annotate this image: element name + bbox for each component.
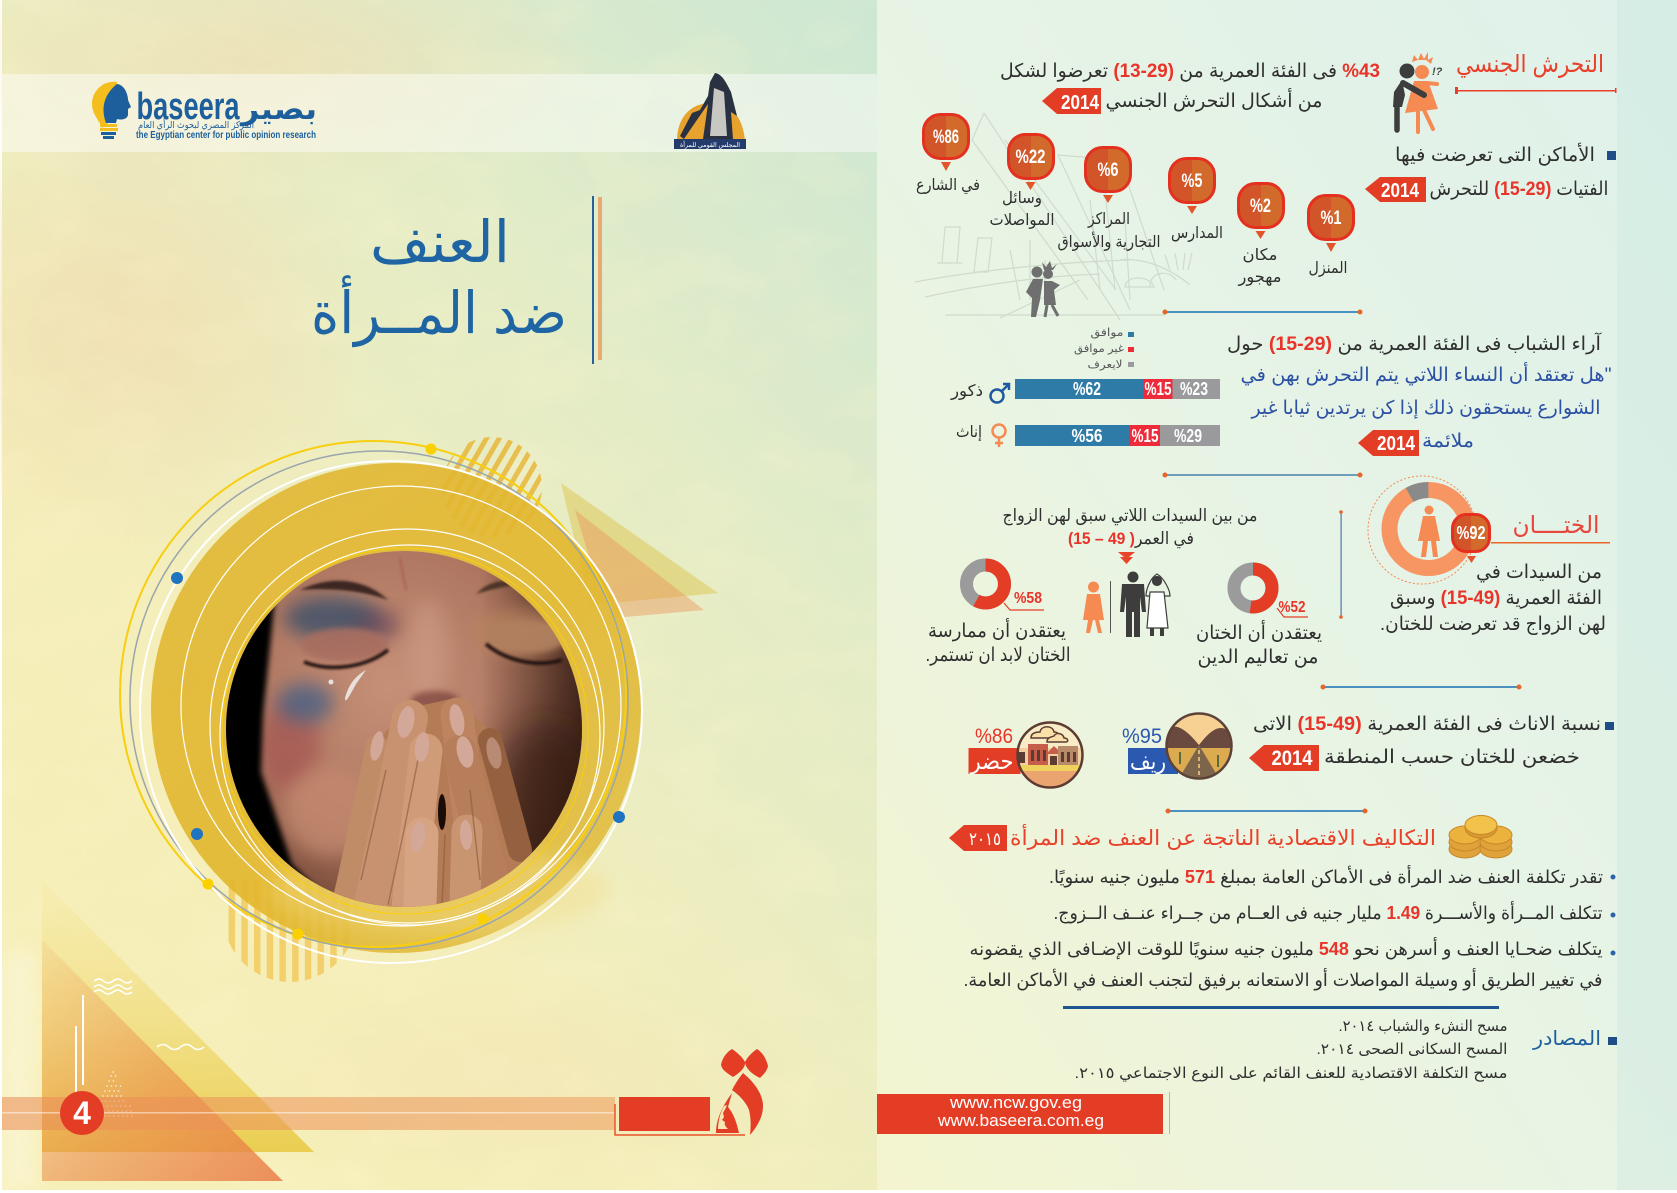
- sources list: [1074, 1018, 1508, 1083]
- stat line 2: من أشكال التحرش الجنسي: [1106, 88, 1322, 112]
- year tag: ٢٠١٥: [969, 829, 1001, 849]
- legend: موافق: [1090, 327, 1124, 340]
- eyelids and lashes: [301, 628, 389, 662]
- section: sexual harassment: [916, 51, 1616, 317]
- year tag: 2014: [1381, 180, 1420, 202]
- right page background: [877, 0, 1677, 1190]
- photo composition: [120, 437, 718, 982]
- bruise: [284, 596, 380, 640]
- ring lower highlight: [270, 845, 610, 935]
- icon: male symbol: [990, 384, 1009, 402]
- bar: male: %62: [1073, 379, 1101, 399]
- brows: [300, 581, 388, 600]
- year tag: 2014: [1377, 433, 1416, 455]
- hatched circle top: [442, 437, 542, 537]
- section heading: التحرش الجنسي: [1456, 51, 1604, 78]
- icon: harassment figures: [1393, 52, 1443, 132]
- icon: urban buildings: [1016, 722, 1084, 791]
- stat text: من السيدات في: [1476, 562, 1602, 583]
- year tag: [1358, 430, 1419, 456]
- stat text: لهن الزواج قد تعرضت للختان.: [1380, 614, 1606, 635]
- places heading line 1: الأماكن التى تعرضت فيها: [1395, 143, 1595, 166]
- website 1: www.ncw.gov.eg: [949, 1093, 1082, 1112]
- cost 1: تقدر تكلفة العنف ضد المرأة فى الأماكن العامة بمبلغ 571 مليون جنيه سنويًا.: [1049, 865, 1603, 888]
- label: deserted place: [1237, 247, 1282, 287]
- logo arabic subtitle: المركز المصري لبحوث الرأي العام: [138, 118, 254, 131]
- horizontal band: [2, 1097, 615, 1130]
- vertical divider: [1339, 510, 1343, 619]
- logo wordmark latin: baseera: [136, 86, 240, 128]
- pin: street: %86: [933, 127, 959, 148]
- sources list: مسح التكلفة الاقتصادية للعنف القائم على النوع الاجتماعي ٢٠١٥.: [1074, 1065, 1508, 1083]
- sources list: المسح السكانى الصحى ٢٠١٤.: [1316, 1041, 1508, 1058]
- sources heading: المصادر: [1532, 1028, 1601, 1050]
- value 52 percent: %52: [1278, 599, 1306, 616]
- title divider bars: [592, 196, 602, 364]
- divider: [1162, 310, 1362, 314]
- label: malls: المراكز: [1087, 211, 1130, 229]
- caption 58 percent: يعتقدن أن ممارسة: [928, 618, 1066, 642]
- bullet cost 1: [1610, 874, 1616, 880]
- bar: female: %15: [1132, 426, 1158, 446]
- title line 1: العنف: [370, 210, 510, 275]
- label: female: إناث: [956, 424, 982, 441]
- pin: deserted place: %2: [1250, 196, 1271, 217]
- orbit dots: [171, 444, 625, 940]
- bullet cost 2: [1610, 912, 1616, 918]
- label: malls: التجارية والأسواق: [1058, 231, 1160, 252]
- year tag: [1365, 177, 1426, 202]
- pin: transport: %22: [1016, 147, 1046, 168]
- pin: schools: [1170, 158, 1214, 214]
- opinion question: "هل تعتقد أن النساء اللاتي يتم التحرش بهن في: [1240, 362, 1612, 386]
- opinion question: [1240, 362, 1612, 452]
- left page background: [0, 0, 877, 1190]
- heading rule: [1455, 87, 1616, 94]
- stat text: [1380, 562, 1606, 635]
- bar: male: [1015, 379, 1220, 399]
- divider: [1162, 472, 1362, 478]
- icon: female symbol: [992, 424, 1006, 447]
- urban value: %86: [975, 725, 1013, 748]
- value 58 percent: %58: [1014, 590, 1042, 607]
- icon: woman profile logo: [716, 1049, 768, 1135]
- cost 2: تتكلف المــرأة والأســـرة 1.49 مليار جنيه فى العــام من جــراء عنــف الــزوج.: [1054, 901, 1602, 924]
- married women heading: في العمر( 49 – 15): [1068, 529, 1194, 549]
- married women heading: [1002, 506, 1258, 549]
- section: by region: [968, 712, 1614, 791]
- logo: national council for women: [674, 73, 746, 149]
- bullet: [1608, 1037, 1617, 1045]
- title line 2: ضد المــرأة: [311, 275, 567, 348]
- bar: male: %23: [1180, 379, 1208, 399]
- bar: female: [1015, 425, 1220, 446]
- year tag: [1249, 745, 1319, 771]
- icon: small grey figures: [1026, 261, 1060, 317]
- places heading line 2: الفتيات (29-15) للتحرش: [1430, 179, 1608, 200]
- page number: 4: [73, 1095, 91, 1131]
- label: home: المنزل: [1308, 260, 1348, 278]
- pin: malls: %6: [1098, 160, 1118, 181]
- divider: [1166, 808, 1368, 814]
- icon: bride and groom: [1120, 572, 1170, 637]
- sources rule: [1063, 1006, 1499, 1009]
- hair shadow: [226, 602, 318, 885]
- opinion question: ملائمة: [1422, 431, 1474, 452]
- label: malls: [1058, 211, 1160, 252]
- heading rule: [1491, 542, 1610, 544]
- label: street: في الشارع: [916, 177, 980, 195]
- logo english subtitle: the Egyptian center for public opinion research: [136, 129, 316, 141]
- label: schools: المدارس: [1171, 225, 1223, 243]
- year tag: [1042, 88, 1101, 114]
- icon: gold coins: [1449, 816, 1512, 858]
- logo wordmark arabic: بصير: [239, 93, 317, 126]
- section heading: الختــــان: [1512, 512, 1600, 539]
- arrow down: [1118, 552, 1135, 564]
- section: circumcision: [926, 476, 1610, 668]
- red bar with outline: [615, 1097, 745, 1135]
- pin 92 percent: [1452, 514, 1490, 563]
- opinion question: الشوارع يستحقون ذلك إذا كن يرتدين ثيابا غير: [1251, 398, 1600, 420]
- bullet: [1607, 151, 1616, 160]
- label: transport: [990, 190, 1054, 230]
- year tag: [949, 825, 1007, 851]
- cost 3: [964, 937, 1602, 991]
- pin: transport: [1008, 134, 1054, 190]
- thin orbit circles: [120, 441, 642, 963]
- legend: [1074, 327, 1134, 371]
- tear: [345, 670, 366, 700]
- decorative triangles right: [561, 483, 718, 618]
- section: economic costs: [949, 816, 1616, 991]
- title: violence against women: [311, 196, 602, 364]
- region text: [1253, 714, 1601, 768]
- region text: خضعن للختان حسب المنطقة: [1324, 747, 1580, 768]
- website 2: www.baseera.com.eg: [937, 1111, 1104, 1130]
- bottom left decoration: [2, 880, 768, 1181]
- nails: [368, 703, 504, 853]
- sources list: مسح النشء والشباب ٢٠١٤.: [1338, 1018, 1508, 1035]
- logo caption: المجلس القومي للمرأة: [680, 140, 740, 149]
- icon: rural desert road: [1165, 712, 1233, 780]
- label: transport: وسائل: [1002, 190, 1042, 208]
- background sketch: street scene: [915, 113, 1192, 320]
- forehead cut: [400, 558, 406, 590]
- bar: female: %29: [1174, 426, 1202, 446]
- opinion heading: آراء الشباب فى الفئة العمرية من (29-15) حول: [1227, 331, 1602, 355]
- donut 92 percent: [1368, 476, 1482, 584]
- hands: [328, 698, 530, 915]
- bar: male: %15: [1144, 379, 1172, 399]
- donut 58 percent: [966, 565, 1004, 603]
- pin: street: [924, 114, 968, 171]
- orange triangle: [42, 940, 283, 1181]
- label: transport: المواصلات: [990, 212, 1054, 230]
- married women heading: من بين السيدات اللاتي سبق لهن الزواج: [1002, 506, 1258, 526]
- footer website box: [877, 1092, 1170, 1134]
- logo: baseera: [92, 82, 317, 141]
- icon: bulb with face: [92, 82, 131, 139]
- legend: لايعرف: [1088, 359, 1122, 371]
- legend: غير موافق: [1074, 343, 1124, 356]
- bullet cost 3: [1610, 950, 1616, 956]
- rural value: %95: [1122, 725, 1162, 748]
- donut 52 percent: [1234, 569, 1272, 607]
- page number: [60, 1091, 104, 1135]
- gold ring: [151, 463, 641, 953]
- pin: malls: [1086, 148, 1130, 203]
- year tag: 2014: [1272, 747, 1313, 770]
- wave marks: [94, 979, 204, 1050]
- pin: schools: %5: [1182, 171, 1203, 192]
- header band with logos: [2, 73, 877, 152]
- caption 52 percent: [1196, 620, 1322, 668]
- caption 58 percent: الختان لابد ان تستمر.: [926, 645, 1070, 666]
- icon: woman orange: [1083, 582, 1104, 633]
- caption 52 percent: من تعاليم الدين: [1198, 647, 1318, 668]
- stat text: الفئة العمرية (49-15) وسبق: [1390, 588, 1602, 609]
- dot triangle: [101, 1072, 136, 1116]
- cost 3: يتكلف ضحـايا العنف و أسرهن نحو 548 مليون جنيه سنويًا للوقت الإضـافى الذي يقضونه: [970, 937, 1602, 960]
- label: deserted place: مكان: [1242, 247, 1278, 264]
- region text: نسبة الاناث فى الفئة العمرية (49-15) الاتى: [1253, 714, 1601, 735]
- divider line: [1110, 581, 1111, 633]
- pin: deserted place: [1238, 184, 1284, 239]
- photo: bruised crying woman: [226, 551, 582, 907]
- label: male: ذكور: [950, 383, 983, 401]
- section: youth opinions: [950, 327, 1612, 456]
- section heading: التكاليف الاقتصادية الناتجة عن العنف ضد المرأة: [1010, 824, 1436, 850]
- label: deserted place: مهجور: [1237, 269, 1282, 287]
- caption 58 percent: [926, 618, 1070, 666]
- icon punctuation: !?: [1432, 66, 1443, 78]
- urban label box: حضر: [970, 748, 1014, 775]
- rural label box: ريف: [1130, 748, 1166, 775]
- nose: [410, 606, 446, 688]
- caption 52 percent: يعتقدن أن الختان: [1196, 620, 1322, 644]
- stat 43 percent: %43 فى الفئة العمرية من (29-13) تعرضوا لشكل: [1000, 61, 1380, 82]
- yellow triangle: [42, 880, 314, 1152]
- pin 92 percent: %92: [1456, 523, 1486, 543]
- finger creases: [361, 760, 480, 905]
- year tag: 2014: [1061, 92, 1100, 114]
- pin: home: [1308, 196, 1354, 252]
- pin: home: %1: [1320, 208, 1342, 229]
- bullet: [1605, 722, 1614, 730]
- cost 3: في تغيير الطريق أو وسيلة المواصلات أو الاستعانه برفيق لتجنب العنف في الأماكن العامة.: [964, 968, 1602, 991]
- divider: [1320, 684, 1522, 690]
- value 58 percent: [1004, 590, 1044, 610]
- bar: female: %56: [1072, 426, 1102, 446]
- white vertical lines: [75, 995, 84, 1092]
- hatched circle bottom: [223, 880, 357, 982]
- icon: woman: [1418, 506, 1440, 557]
- section: sources: [1074, 1018, 1617, 1083]
